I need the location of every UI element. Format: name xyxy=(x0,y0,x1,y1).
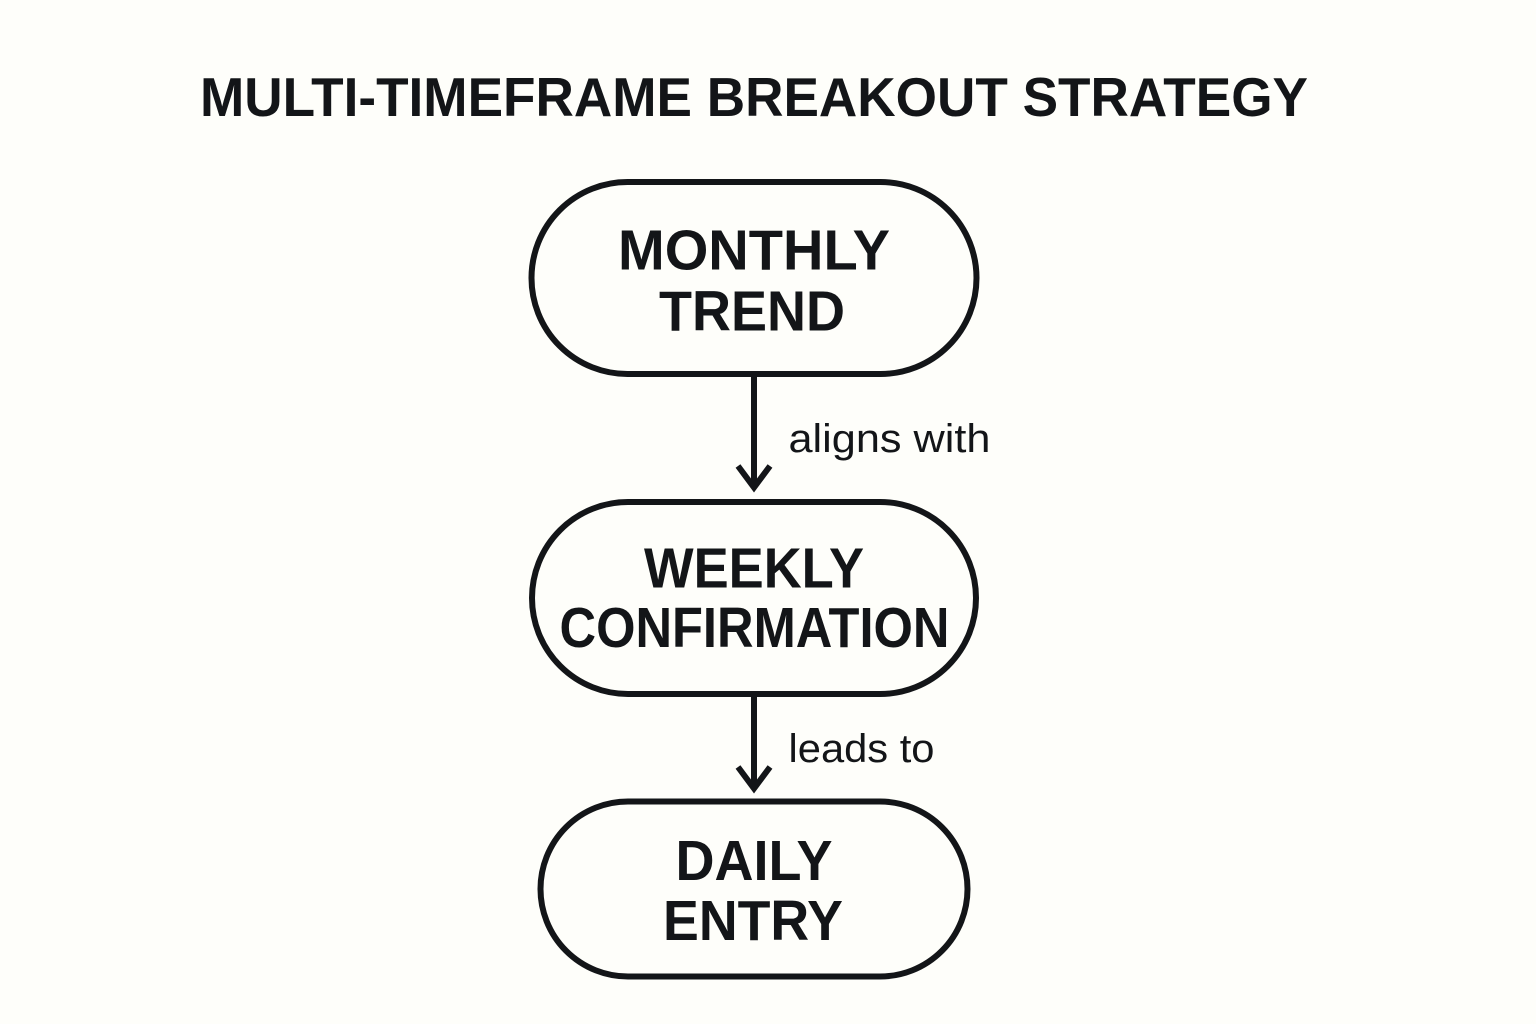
node: monthly trend: TREND xyxy=(659,280,845,344)
node: daily entry: ENTRY xyxy=(663,889,843,953)
label: leads to: leads to xyxy=(788,727,934,771)
node: weekly confirmation xyxy=(532,502,976,694)
arrow: weekly to daily xyxy=(738,696,770,788)
label: aligns with: aligns with xyxy=(788,417,990,461)
node: weekly confirmation: WEEKLY xyxy=(644,536,864,600)
arrow: monthly to weekly xyxy=(738,376,770,488)
node: monthly trend xyxy=(532,182,976,374)
node: daily entry: DAILY xyxy=(676,829,832,893)
node: monthly trend: MONTHLY xyxy=(618,218,890,282)
title: MULTI-TIMEFRAME BREAKOUT STRATEGY xyxy=(200,66,1308,128)
node: weekly confirmation: CONFIRMATION xyxy=(560,596,950,660)
node: daily entry xyxy=(540,802,968,976)
